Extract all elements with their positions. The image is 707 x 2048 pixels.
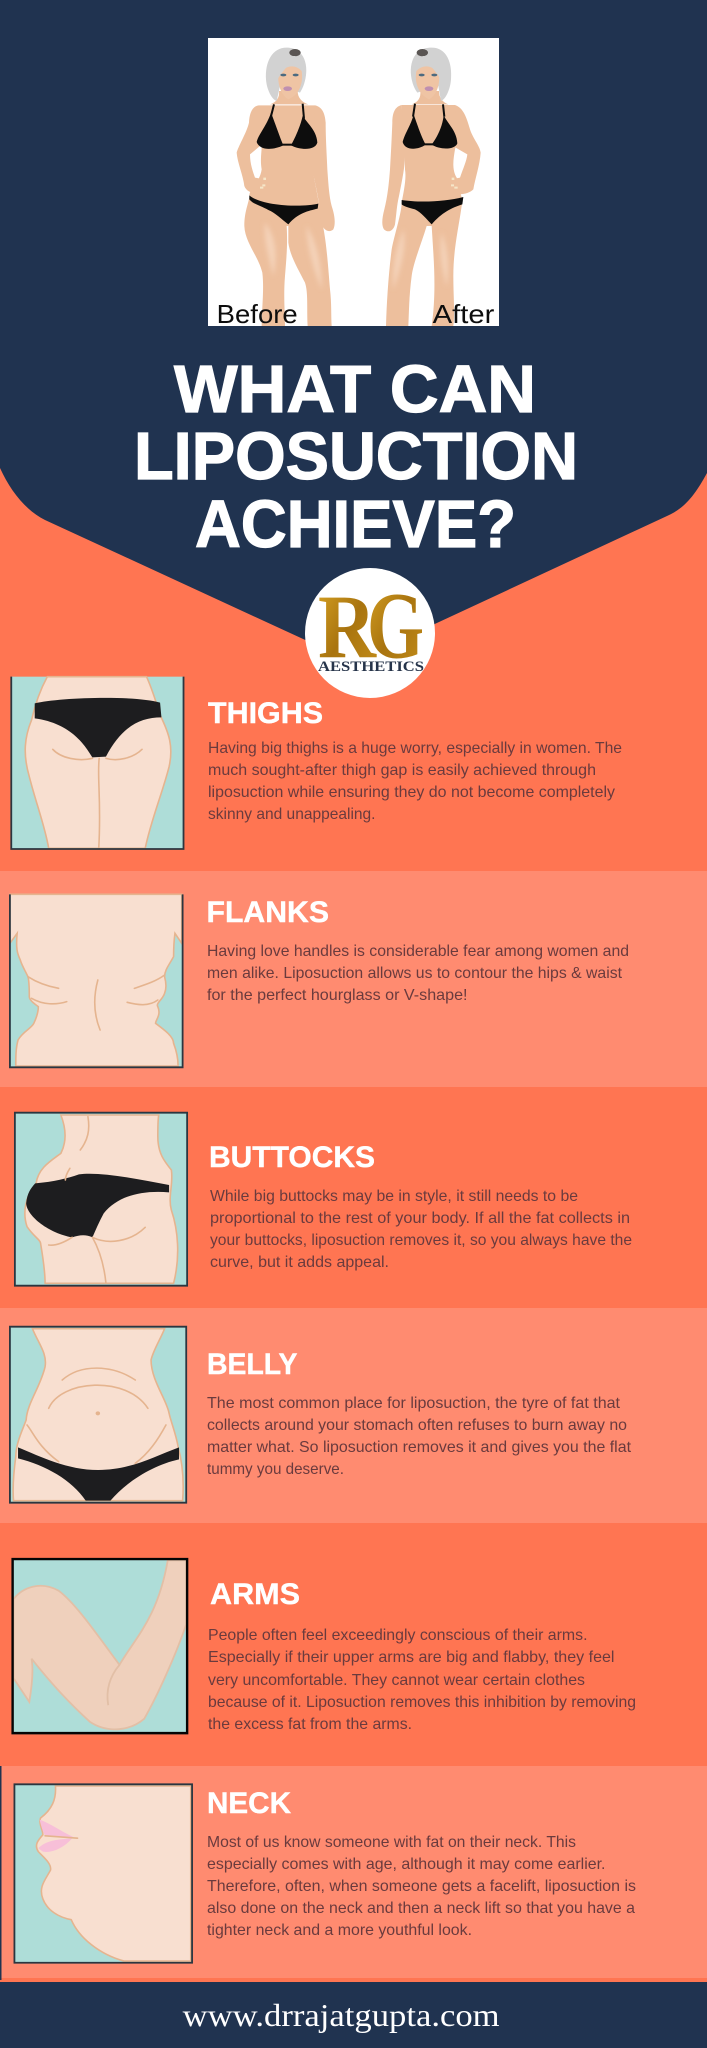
heading: buttocks: BUTTOCKS xyxy=(209,1141,375,1174)
logo badge: AESTHETICS xyxy=(318,659,424,675)
logo badge xyxy=(305,568,435,698)
text: arms: very uncomfortable. They cannot wear certain clothes xyxy=(208,1672,585,1689)
heading: belly: BELLY xyxy=(207,1348,298,1381)
illustration: flanks xyxy=(10,894,183,1067)
logo badge: G xyxy=(367,572,424,678)
panel: thighs xyxy=(0,663,707,871)
text: flanks xyxy=(207,943,629,1004)
text: belly: tummy you deserve. xyxy=(207,1461,344,1478)
text: neck: Therefore, often, when someone gets a facelift, liposuction is xyxy=(207,1878,636,1895)
text: neck: also done on the neck and then a neck lift so that you have a xyxy=(207,1900,635,1917)
text: arms: because of it. Liposuction removes this inhibition by removing xyxy=(208,1694,636,1711)
heading: arms: ARMS xyxy=(210,1578,300,1611)
title: LIPOSUCTION xyxy=(134,419,578,494)
text: belly: collects around your stomach often refuses to burn away no xyxy=(207,1417,627,1434)
text: buttocks xyxy=(210,1188,632,1271)
panel: flanks xyxy=(0,871,707,1087)
text: thighs: skinny and unappealing. xyxy=(208,806,376,823)
text: thighs: Having big thighs is a huge worry, especially in women. The xyxy=(208,740,622,757)
heading: flanks: FLANKS xyxy=(206,896,329,929)
header navy shield xyxy=(0,0,707,662)
text: belly: The most common place for liposuction, the tyre of fat that xyxy=(207,1395,621,1412)
text: buttocks: While big buttocks may be in style, it still needs to be xyxy=(210,1188,578,1205)
label: Before: Before xyxy=(217,299,298,329)
text: belly: matter what. So liposuction removes it and gives you the flat xyxy=(207,1439,632,1456)
panel: arms xyxy=(0,1523,707,1766)
text: buttocks: your buttocks, liposuction removes it, so you always have the xyxy=(210,1232,632,1249)
text: thighs: liposuction while ensuring they do not become completely xyxy=(208,784,615,801)
text: belly xyxy=(207,1395,632,1478)
illustration: buttocks xyxy=(15,1113,187,1286)
panel: belly xyxy=(0,1308,707,1523)
text: arms: People often feel exceedingly conscious of their arms. xyxy=(208,1627,588,1644)
text: arms xyxy=(208,1627,636,1733)
text: buttocks: curve, but it adds appeal. xyxy=(210,1254,389,1271)
text: arms: Especially if their upper arms are big and flabby, they feel xyxy=(208,1649,614,1666)
illustration: belly xyxy=(10,1327,186,1503)
text: neck xyxy=(207,1834,636,1939)
text: neck: tighter neck and a more youthful look. xyxy=(207,1922,472,1939)
illustration: arms xyxy=(12,1558,188,1734)
title: ACHIEVE? xyxy=(195,487,516,562)
title xyxy=(134,352,578,562)
heading: thighs: THIGHS xyxy=(208,697,323,730)
heading: neck: NECK xyxy=(207,1787,291,1820)
text: flanks: men alike. Liposuction allows us to contour the hips & waist xyxy=(207,965,623,982)
text: neck: especially comes with age, although it may come earlier. xyxy=(207,1856,606,1873)
footer: www.drrajatgupta.com xyxy=(183,1997,500,2033)
text: arms: the excess fat from the arms. xyxy=(208,1716,412,1733)
before figure xyxy=(237,48,335,326)
before and after photo xyxy=(208,38,499,329)
illustration: thighs xyxy=(11,677,184,849)
text: thighs: much sought-after thigh gap is easily achieved through xyxy=(208,762,596,779)
panel: neck xyxy=(0,1766,707,1980)
text: buttocks: proportional to the rest of your body. If all the fat collects in xyxy=(210,1210,630,1227)
panel: buttocks xyxy=(0,1087,707,1308)
text: neck: Most of us know someone with fat on their neck. This xyxy=(207,1834,576,1851)
illustration: neck xyxy=(14,1784,193,1963)
logo badge: R xyxy=(318,576,377,678)
footer xyxy=(0,1982,707,2048)
text: flanks: Having love handles is considerable fear among women and xyxy=(207,943,629,960)
after figure xyxy=(382,48,481,326)
text: flanks: for the perfect hourglass or V-shape! xyxy=(207,987,468,1004)
text: thighs xyxy=(208,740,622,823)
title: WHAT CAN xyxy=(174,352,536,427)
label: After: After xyxy=(433,299,495,329)
